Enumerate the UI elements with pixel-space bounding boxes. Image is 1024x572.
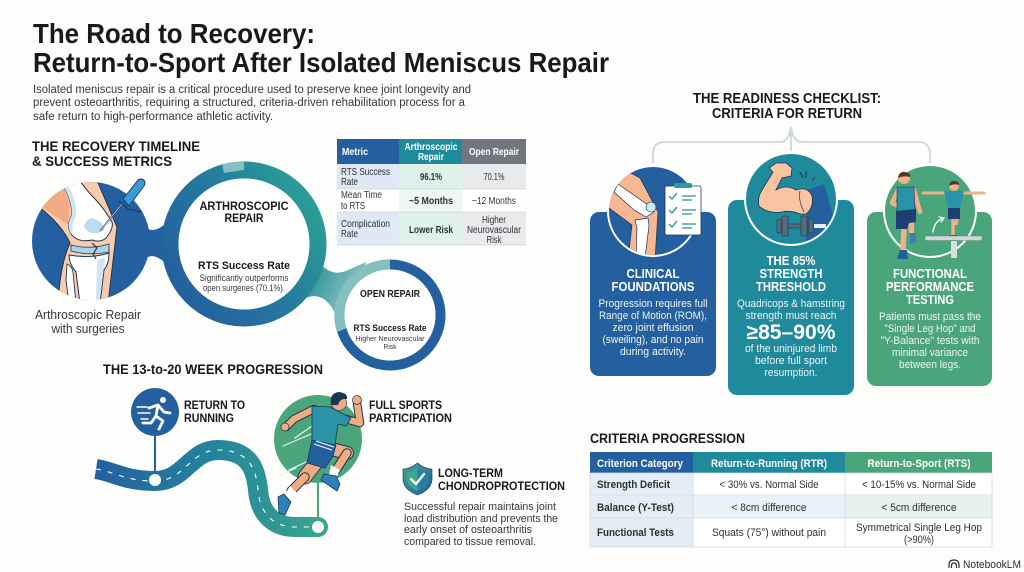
panel: clinical foundations: during activity. [620,346,686,358]
panel: open repair ring: OPEN REPAIR [360,289,421,300]
label: return to running [184,400,245,425]
text: chondroprotection body: compared to tissue removal. [404,536,536,548]
heading: week progression: THE 13-to-20 WEEK PROGRESSION [103,361,323,377]
comparison table: Arthroscopic [404,142,458,153]
heading: readiness checklist [693,91,881,122]
comparison table: Complication [341,219,390,230]
intro text: prevent osteoarthritis, requiring a structured, criteria-driven rehabilitation process for a [33,97,466,109]
comparison table: Rate [341,229,358,240]
heading: recovery timeline: & SUCCESS METRICS [32,153,172,169]
heading: readiness checklist: THE READINESS CHECKLIST: [693,91,881,107]
comparison table: ~12 Months [472,196,516,207]
panel: functional performance testing: FUNCTIONAL [893,266,967,281]
heading: recovery timeline [32,138,200,169]
panel: functional performance testing [867,164,992,386]
panel: clinical foundations: (sweiling), and no pain [602,334,704,346]
panel: open repair ring: Higher Neurovascular [356,334,425,343]
panel: strength threshold: Quadricops & hamstring [737,298,845,310]
icon: athletes hopping and balancing [883,164,984,259]
text: chondroprotection body: Successful repair maintains joint [404,501,556,513]
panel: arthroscopic ring: Significantly outperforms [200,273,289,283]
criteria table: Balance (Y-Test) [597,502,674,514]
criteria table: Return-to-Sport (RTS) [868,458,971,470]
intro text [33,84,471,123]
criteria table [590,452,992,547]
criteria table: Return-to-Running (RTR) [711,458,827,470]
panel: strength threshold: strength must reach [746,310,836,322]
panel: functional performance testing: PERFORMANCE [886,279,974,294]
panel: strength threshold: resumption. [764,367,818,379]
comparison table: ~5 Months [409,196,453,207]
panel: functional performance testing: "Single Leg Hop" and [884,323,976,335]
bracket [653,127,930,163]
panel: strength threshold: of the uninjured limb [745,343,837,355]
criteria table: Squats (75°) without pain [712,527,826,539]
comparison table: Rate [341,177,358,188]
panel: strength threshold: ≥85–90% [746,321,836,344]
icon: shield check [403,463,432,495]
text: chondroprotection body [404,501,558,548]
panel: clinical foundations: CLINICAL [626,266,680,281]
panel: clinical foundations: FOUNDATIONS [612,279,695,294]
heading: criteria progression: CRITERIA PROGRESSION [590,430,745,446]
label: full sports participation [369,400,452,425]
comparison table: to RTS [341,201,365,212]
title: Return-to-Sport After Isolated Meniscus Repair [33,47,609,78]
criteria table: Symmetrical Single Leg Hop [856,522,982,534]
panel: strength threshold: THRESHOLD [756,279,826,294]
criteria table: < 5cm difference [882,502,956,514]
title: The Road to Recovery: [33,18,315,49]
comparison table: Mean Time [341,190,382,201]
panel: open repair ring: RTS Success Rate [354,323,426,333]
intro text: Isolated meniscus repair is a critical procedure used to preserve knee joint longevity and [33,84,471,96]
panel: strength threshold: before full sport [755,355,827,367]
criteria table: < 30% vs. Normal Side [720,479,818,491]
panel: arthroscopic ring: ARTHROSCOPIC [200,199,289,213]
panel: strength threshold: STRENGTH [760,266,822,281]
comparison table: Risk [486,235,502,246]
panel: strength threshold: THE 85% [766,253,816,268]
comparison table: Neurovascular [467,225,522,236]
panel: functional performance testing: TESTING [906,292,954,307]
panel: clinical foundations: Range of Motion (ROM), [599,310,707,322]
panel: arthroscopic ring: REPAIR [224,211,264,225]
criteria table: < 10-15% vs. Normal Side [862,479,976,491]
heading: long-term chondroprotection: LONG-TERM [438,468,503,480]
panel: functional performance testing: between legs. [899,359,961,371]
panel: functional performance testing: "Y-Balance" tests with [880,335,980,347]
intro text: safe return to high-performance athletic activity. [33,111,273,123]
icon: sprinting athlete [274,392,362,515]
criteria table: < 8cm difference [732,502,806,514]
criteria table: Criterion Category [597,458,684,470]
criteria table: Strength Deficit [597,479,670,491]
label: return to running: RETURN TO [184,400,245,412]
heading: long-term chondroprotection [438,468,565,493]
panel: arthroscopic ring [170,161,318,318]
connector shapes [128,203,366,336]
title [33,18,609,78]
panel: functional performance testing: Patients must pass the [879,311,981,323]
panel: open repair ring [334,259,440,366]
label: full sports participation: FULL SPORTS [369,400,442,412]
panel: arthroscopic ring: RTS Success Rate [198,260,290,272]
comparison table: 70.1% [484,172,505,183]
comparison table [337,139,526,246]
comparison table: 96.1% [420,172,442,183]
panel: clinical foundations: zero joint effusion [612,322,694,334]
panel: arthroscopic ring: open surgeries (70.1%). [203,283,285,293]
icon: flexed arm and dumbbell [744,152,840,246]
road path [96,430,328,537]
logo: NotebookLM: NotebookLM [963,559,1021,571]
heading: long-term chondroprotection: CHONDROPROTECTION [438,481,565,493]
panel: strength threshold [728,152,854,395]
icon: return to running [131,388,179,436]
text: chondroprotection body: early onset of osteoarthritis [404,524,532,536]
criteria table: (>90%) [904,534,934,546]
label: arthroscopic repair with surgeries: Arthroscopic Repair [35,308,141,322]
comparison table: Repair [418,152,444,163]
criteria table: Functional Tests [597,527,674,539]
panel: clinical foundations [590,165,716,376]
panel: clinical foundations: Progression requires full [598,298,708,310]
comparison table: Metric [342,147,368,158]
comparison table: RTS Success [341,167,390,178]
panel: open repair ring: Risk [384,342,397,351]
heading: recovery timeline: THE RECOVERY TIMELINE [32,138,200,154]
label: arthroscopic repair with surgeries: with surgeries [51,322,125,336]
label: arthroscopic repair with surgeries [35,308,141,336]
icon: knee and clipboard [605,165,701,260]
panel: functional performance testing: minimal variance [892,347,968,359]
label: full sports participation: PARTICIPATION [369,413,452,425]
icon: knee with arthroscopic tool [32,178,150,304]
heading: readiness checklist: CRITERIA FOR RETURN [712,106,862,122]
text: chondroprotection body: load distribution and prevents the [404,513,558,525]
comparison table: Lower Risk [409,225,453,236]
comparison table: Higher [482,215,507,226]
comparison table: Open Repair [469,147,519,158]
label: return to running: RUNNING [184,413,234,425]
